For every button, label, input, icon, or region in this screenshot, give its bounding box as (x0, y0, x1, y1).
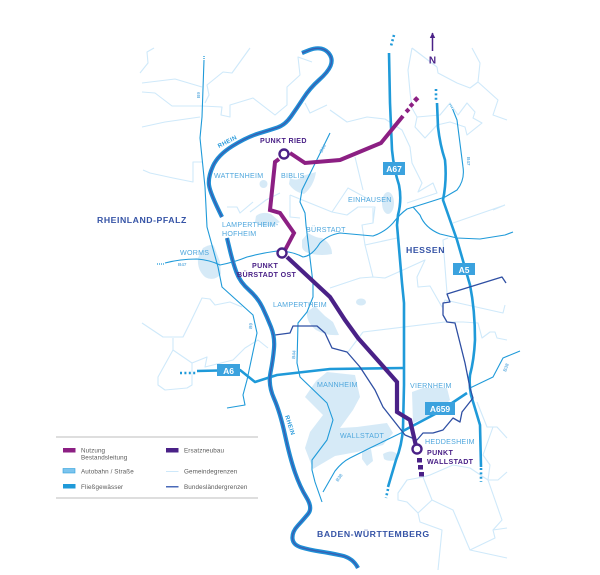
town labels: LAMPERTHEIM (273, 301, 327, 309)
river and road small labels: RHEIN (217, 135, 238, 150)
river Rhine (209, 48, 358, 568)
river and road small labels: B38 (335, 472, 344, 483)
road sign: A67 (383, 162, 405, 175)
road B38 (323, 351, 520, 492)
north arrow: N (429, 56, 436, 66)
town labels (180, 172, 475, 446)
road B44 (297, 133, 333, 502)
node: Punkt Ried (280, 150, 288, 158)
state labels: HESSEN (406, 245, 445, 255)
river and road small labels: B9 (248, 322, 254, 329)
point labels: PUNKT (252, 262, 279, 270)
road sign: A5: A5 (459, 265, 470, 275)
town labels: LAMPERTHEIM- (222, 221, 279, 229)
river and road small labels: B44 (319, 143, 327, 154)
north arrow (429, 32, 436, 66)
municipal boundaries (140, 48, 507, 570)
motorway A67 (388, 53, 404, 487)
point labels: PUNKT RIED (260, 137, 307, 145)
state labels: RHEINLAND-PFALZ (97, 215, 187, 225)
road sign: A67: A67 (386, 164, 402, 174)
town labels: BÜRSTADT (306, 226, 346, 234)
road sign: A6: A6 (223, 366, 234, 376)
river and road small labels: B9 (196, 92, 201, 98)
node: Punkt Bürstadt Ost (278, 248, 286, 258)
legend (56, 436, 258, 498)
road B47 (165, 110, 463, 265)
node: Punkt Wallstadt (412, 444, 422, 454)
point labels: BÜRSTADT OST (237, 270, 297, 279)
legend: Gemeindegrenzen: Gemeindegrenzen (184, 468, 238, 476)
legend: Nutzung Bestandsleitung: Nutzung (81, 448, 106, 454)
town labels: WORMS (180, 249, 209, 257)
roads (157, 35, 520, 502)
town labels: HEDDESHEIM (425, 438, 475, 446)
water areas (198, 172, 450, 469)
river and road small labels: B47 (466, 157, 471, 166)
motorway A6 (197, 368, 404, 382)
road sign: A6 (217, 364, 240, 376)
road sign: A659 (425, 402, 455, 415)
point labels: PUNKT (427, 449, 454, 457)
river and road small labels: B47 (178, 262, 187, 267)
river and road small labels: B38 (502, 362, 510, 372)
road B9 (200, 60, 257, 408)
state labels (97, 215, 445, 539)
town labels: BIBLIS (281, 172, 305, 180)
town labels: MANNHEIM (317, 381, 358, 389)
legend: Ersatzneubau (166, 448, 224, 454)
town labels: WALLSTADT (340, 432, 384, 440)
road east branch (413, 207, 513, 239)
town labels: EINHAUSEN (348, 196, 392, 204)
legend: Nutzung Bestandsleitung (63, 448, 128, 462)
river and road small labels (178, 92, 510, 483)
motorway A659 (403, 393, 467, 431)
road sign: A659: A659 (430, 404, 450, 414)
new line: Ersatzneubau (287, 257, 424, 476)
road sign: A5 (453, 263, 475, 275)
legend: Nutzung Bestandsleitung: Bestandsleitung (81, 454, 128, 462)
river and road small labels: RHEIN (283, 415, 295, 436)
town labels: VIERNHEIM (410, 382, 452, 390)
river and road small labels: B44 (291, 350, 297, 359)
motorway A5 (437, 103, 481, 467)
legend: Autobahn / Straße: Autobahn / Straße (81, 468, 134, 476)
town labels: HOFHEIM (222, 230, 256, 238)
point labels: WALLSTADT (427, 458, 474, 466)
point labels (237, 137, 474, 466)
state border (275, 277, 506, 440)
legend: Bundesländergrenzen: Bundesländergrenzen (184, 484, 248, 491)
legend: Ersatzneubau: Ersatzneubau (184, 448, 224, 454)
state labels: BADEN-WÜRTTEMBERG (317, 529, 430, 539)
legend: Fließgewässer: Fließgewässer (81, 484, 123, 491)
existing line: Nutzung Bestandsleitung (270, 96, 419, 252)
town labels: WATTENHEIM (214, 172, 263, 180)
